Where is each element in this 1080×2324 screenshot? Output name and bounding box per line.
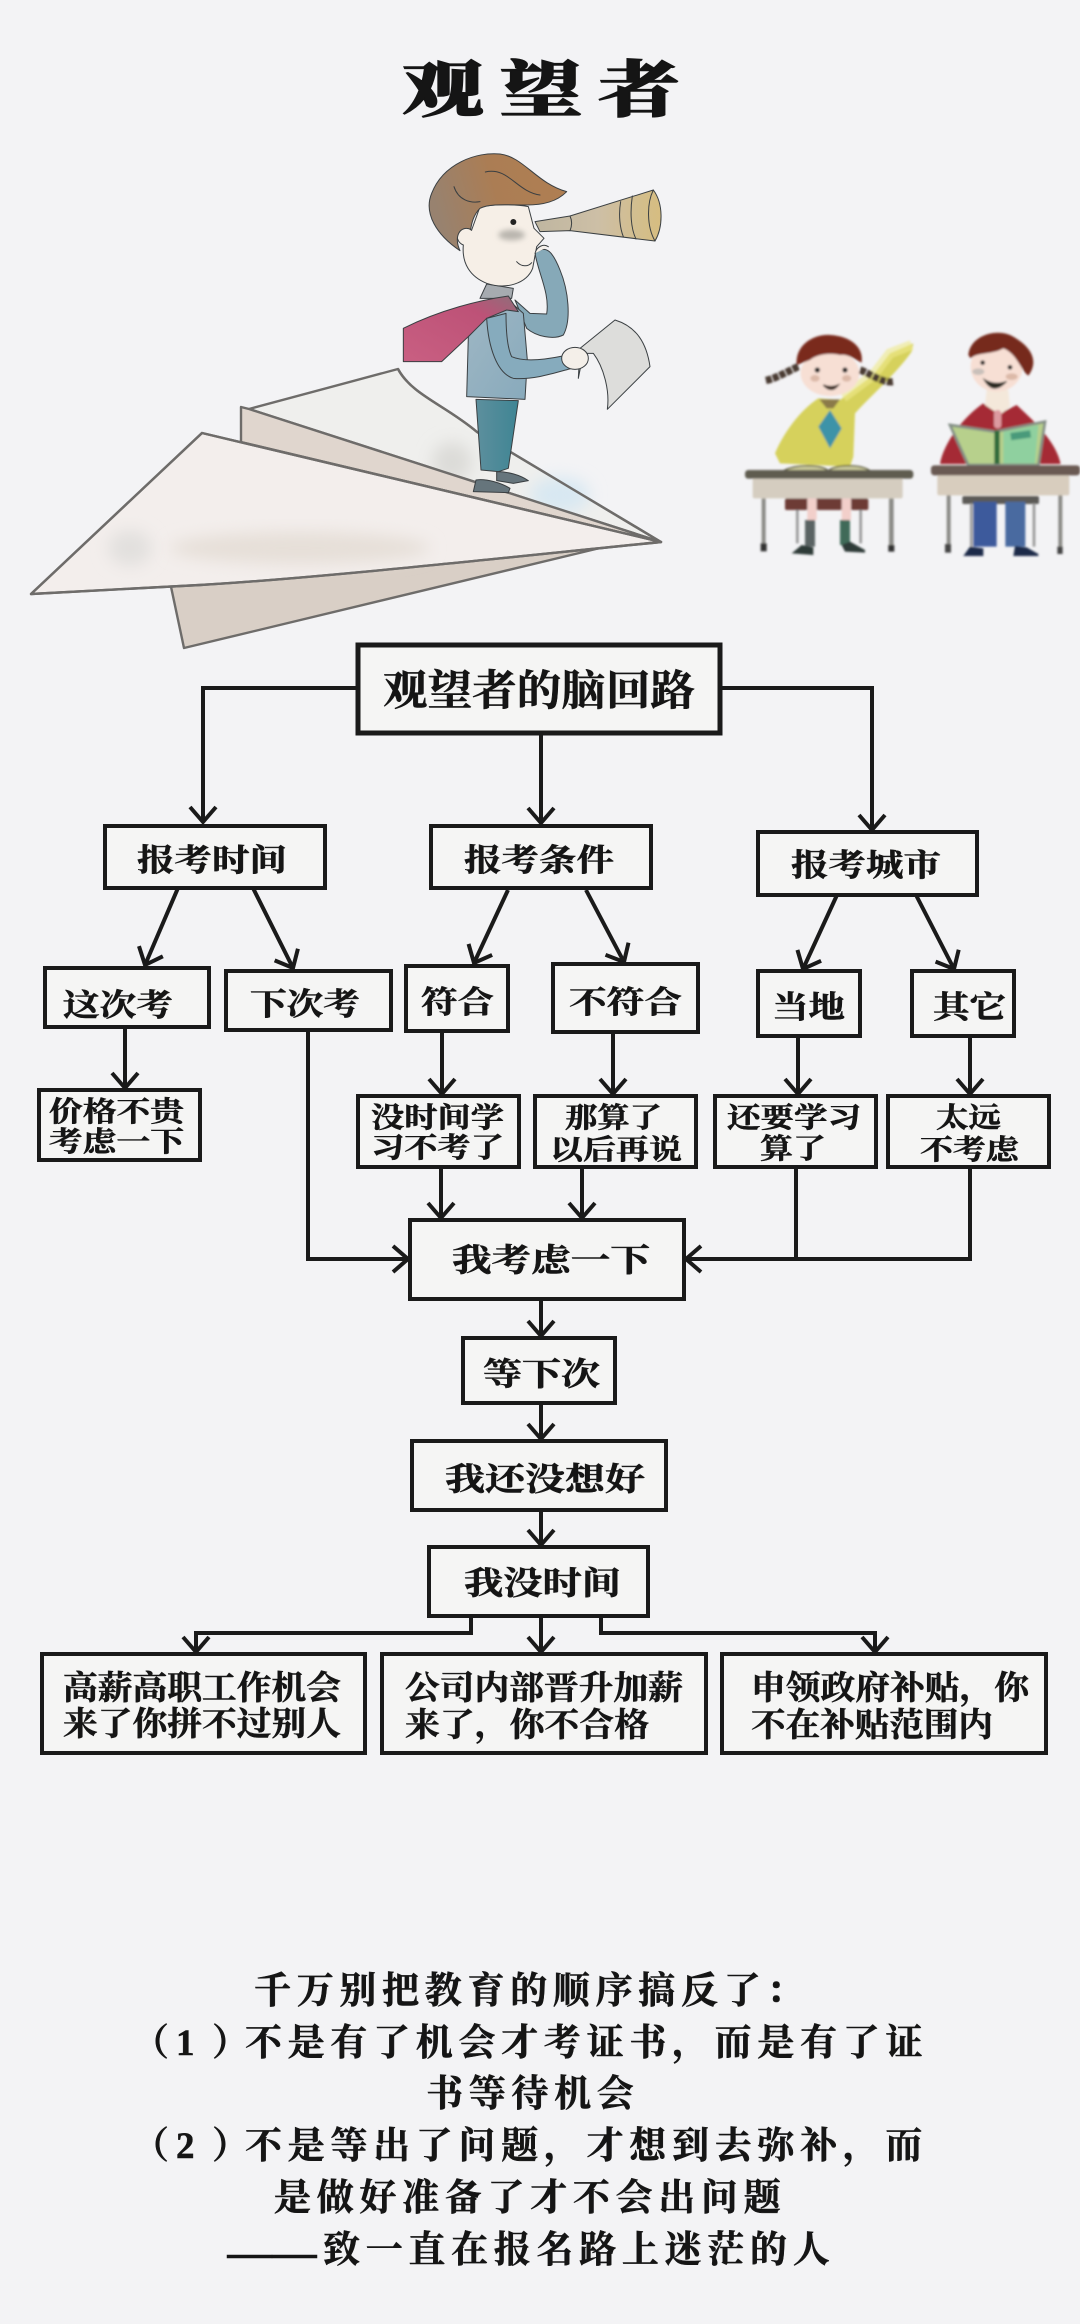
scarf bbox=[403, 296, 518, 362]
box: no time to study bbox=[358, 1096, 519, 1167]
arrow: conditions to not eligible bbox=[586, 890, 624, 962]
boy desk bbox=[931, 465, 1080, 556]
box: too far: 太远 bbox=[936, 1102, 1001, 1134]
arrow: no time to promotion bbox=[539, 1616, 543, 1652]
box: forget it: 以后再说 bbox=[550, 1134, 682, 1166]
shoes bbox=[473, 472, 528, 493]
line 4: 2 bbox=[176, 2126, 200, 2167]
line 6: 致一直在报名路上迷茫的人 bbox=[323, 2229, 835, 2271]
illustration: pupils at desks bbox=[745, 333, 1080, 556]
arrow: no time to job bbox=[196, 1616, 471, 1652]
box: let me think: 我考虑一下 bbox=[452, 1242, 651, 1278]
title: 观望者 bbox=[402, 57, 696, 125]
box: still need to study: 还要学习 bbox=[727, 1102, 861, 1134]
arrow: no time to subsidy bbox=[601, 1616, 875, 1652]
arrow: right branch into consider bbox=[686, 1167, 970, 1259]
line 2: ） bbox=[212, 2023, 255, 2064]
box: exam city bbox=[758, 832, 977, 895]
box: price not high bbox=[39, 1090, 200, 1160]
box: high-pay job: 高薪高职工作机会 bbox=[63, 1670, 341, 1707]
line 4: 不是等出了问题，才想到去弥补，而 bbox=[245, 2125, 928, 2167]
box: too far bbox=[888, 1096, 1049, 1167]
box: no time to study: 没时间学 bbox=[371, 1102, 504, 1134]
box: promotion: 来了，你不合格 bbox=[405, 1707, 649, 1744]
box: exam city: 报考城市 bbox=[791, 848, 941, 883]
box: this exam: 这次考 bbox=[63, 988, 173, 1023]
box: eligible: 符合 bbox=[421, 985, 494, 1020]
box: this exam bbox=[45, 968, 209, 1027]
eye bbox=[510, 219, 516, 225]
box: other: 其它 bbox=[933, 990, 1006, 1025]
box: no time bbox=[429, 1547, 648, 1616]
flowchart bbox=[39, 645, 1049, 1753]
box: local bbox=[758, 971, 860, 1036]
arrow: time to next exam bbox=[253, 888, 293, 968]
legs bbox=[476, 399, 518, 472]
hand on face bbox=[535, 245, 548, 253]
arrow: wait to not decided bbox=[539, 1403, 543, 1439]
arrow: no time into consider bbox=[439, 1167, 443, 1218]
box: promotion: 公司内部晋升加薪 bbox=[405, 1670, 683, 1707]
line 6: —— bbox=[227, 2227, 317, 2278]
box: wait for next time bbox=[463, 1338, 615, 1403]
box: exam time bbox=[105, 826, 325, 888]
line 4: ） bbox=[212, 2126, 255, 2167]
hand bbox=[562, 347, 588, 369]
keel flap bbox=[241, 407, 661, 542]
box: let me think bbox=[410, 1220, 684, 1299]
illustration: man with telescope bbox=[403, 154, 661, 493]
box: exam time: 报考时间 bbox=[137, 843, 287, 878]
boy bbox=[940, 333, 1061, 465]
box: no time to study: 习不考了 bbox=[371, 1132, 504, 1164]
lower flap bbox=[170, 548, 600, 648]
arrow: conditions to eligible bbox=[474, 890, 508, 963]
box: not decided: 我还没想好 bbox=[445, 1461, 645, 1497]
box: promotion bbox=[382, 1654, 706, 1753]
box: wait for next time: 等下次 bbox=[483, 1356, 600, 1392]
arrow: not decided to no time bbox=[539, 1510, 543, 1545]
collar bbox=[480, 284, 513, 298]
arrow: root to time bbox=[203, 688, 358, 822]
box: still need to study: 算了 bbox=[760, 1133, 826, 1165]
arrow: consider to wait bbox=[539, 1299, 543, 1336]
line 5: 是做好准备了才不会出问题 bbox=[274, 2177, 786, 2219]
line 2: 1 bbox=[176, 2023, 200, 2064]
box: next exam bbox=[226, 971, 391, 1030]
telescope bbox=[535, 190, 661, 241]
box: eligible bbox=[406, 966, 508, 1031]
box: local: 当地 bbox=[772, 990, 845, 1025]
box: not decided bbox=[412, 1441, 666, 1510]
girl bbox=[765, 335, 913, 467]
line 1: 千万别把教育的顺序搞反了： bbox=[254, 1970, 809, 2012]
face bbox=[457, 205, 544, 286]
illustration: paper plane bbox=[31, 369, 661, 648]
line 2: （ bbox=[132, 2023, 175, 2064]
box: high-pay job: 来了你拼不过别人 bbox=[63, 1706, 341, 1743]
line 2: 不是有了机会才考证书，而是有了证 bbox=[245, 2022, 928, 2064]
front arm bbox=[487, 313, 572, 379]
box: root: 观望者的脑回路 bbox=[383, 668, 695, 715]
connector: still need to study bbox=[794, 1167, 798, 1259]
box: no time: 我没时间 bbox=[464, 1565, 621, 1601]
box: exam conditions bbox=[431, 826, 651, 888]
box: not eligible: 不符合 bbox=[569, 985, 682, 1020]
line 6 bbox=[227, 2227, 835, 2278]
box: exam conditions: 报考条件 bbox=[464, 843, 614, 878]
arrow: root to city bbox=[720, 688, 872, 830]
box: other bbox=[912, 971, 1014, 1036]
box: price not high: 价格不贵 bbox=[49, 1096, 189, 1128]
arrow: this exam down bbox=[123, 1027, 127, 1088]
arrow: city to other bbox=[916, 895, 954, 969]
arrow: city to local bbox=[803, 895, 837, 969]
arrow: not eligible down bbox=[611, 1032, 615, 1094]
main wing bbox=[31, 433, 661, 594]
box: still need to study bbox=[715, 1096, 876, 1167]
box: forget it bbox=[535, 1096, 696, 1167]
arrow: root to conditions bbox=[539, 733, 543, 823]
box: next exam: 下次考 bbox=[250, 987, 360, 1022]
raised arm bbox=[515, 249, 568, 337]
box: root bbox=[358, 645, 720, 733]
arrow: forget it into consider bbox=[580, 1167, 584, 1218]
line 4: （ bbox=[132, 2126, 175, 2167]
box: subsidy: 不在补贴范围内 bbox=[751, 1707, 993, 1744]
closing message bbox=[132, 1970, 928, 2278]
torso bbox=[467, 300, 527, 399]
arrow: local down bbox=[796, 1036, 800, 1094]
arrow: time to this exam bbox=[145, 888, 178, 965]
arrow: eligible down bbox=[440, 1031, 444, 1094]
box: too far: 不考虑 bbox=[920, 1134, 1021, 1166]
box: not eligible bbox=[553, 964, 698, 1032]
girl desk bbox=[745, 466, 913, 555]
line 3: 书等待机会 bbox=[426, 2073, 640, 2115]
arrow: other down bbox=[968, 1036, 972, 1094]
box: price not high: 考虑一下 bbox=[49, 1126, 185, 1158]
paper bbox=[578, 320, 650, 409]
box: forget it: 那算了 bbox=[565, 1102, 662, 1134]
box: high-pay job bbox=[42, 1654, 365, 1753]
far wing bbox=[249, 369, 661, 542]
hair bbox=[429, 154, 567, 251]
arrow: next exam into consider bbox=[308, 1030, 408, 1259]
box: subsidy bbox=[722, 1654, 1046, 1753]
box: subsidy: 申领政府补贴，你 bbox=[751, 1670, 1032, 1707]
